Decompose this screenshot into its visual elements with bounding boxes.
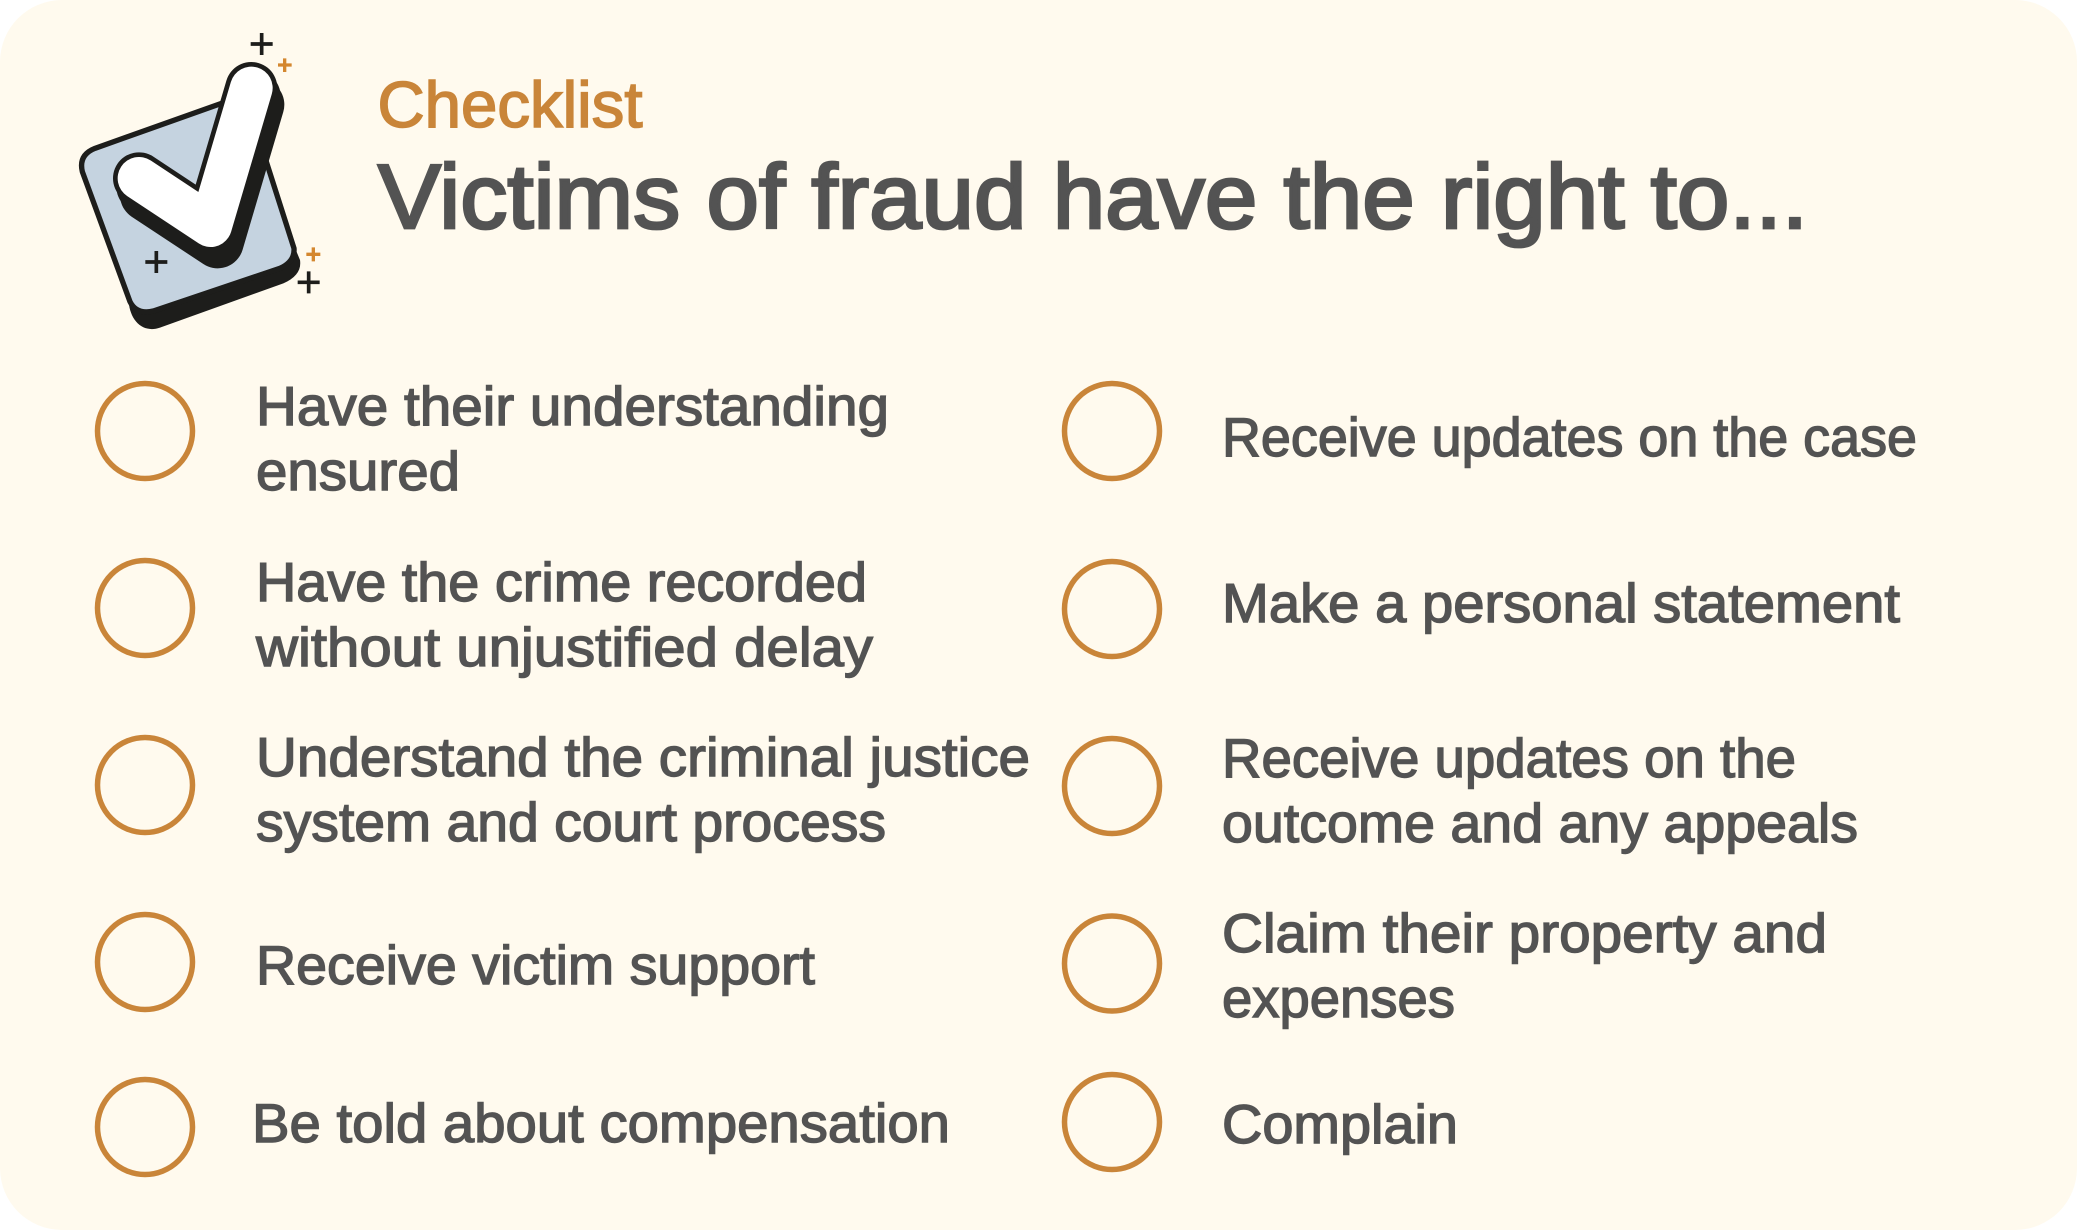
checklist item: case updates [1064, 384, 1917, 478]
checklist item: crime recorded [98, 551, 874, 678]
checklist item: outcome updates: Receive updates on the [1222, 727, 1796, 789]
checklist item: understanding [98, 375, 889, 502]
checklist item: victim support [98, 914, 815, 1010]
icon: checkbox with tick [82, 33, 320, 329]
checklist item: outcome updates [1064, 727, 1858, 854]
checklist item: case updates: Receive updates on the case [1222, 406, 1917, 468]
checklist item: outcome updates: outcome and any appeals [1222, 792, 1858, 854]
checklist item: property and expenses [1064, 902, 1827, 1029]
checklist item: understanding: Have their understanding [256, 375, 889, 437]
checklist item: justice system: Understand the criminal justice [256, 726, 1030, 788]
checklist item: crime recorded: without unjustified delay [255, 616, 874, 678]
checklist item: understanding: ensured [256, 440, 460, 502]
checklist item: justice system: system and court process [256, 791, 886, 853]
checklist item: compensation: Be told about compensation [252, 1092, 950, 1154]
checklist item: crime recorded: Have the crime recorded [256, 551, 867, 613]
checklist item: justice system [98, 726, 1030, 853]
checklist item: personal statement: Make a personal statement [1222, 572, 1900, 634]
checklist item: complain [1064, 1074, 1458, 1170]
eyebrow: Checklist: Checklist [378, 68, 642, 141]
checklist item: victim support: Receive victim support [256, 934, 815, 996]
title: Victims of fraud have the right to... [378, 147, 1808, 248]
checklist item: property and expenses: expenses [1222, 967, 1455, 1029]
checklist item: personal statement [1064, 562, 1900, 656]
checklist item: property and expenses: Claim their property and [1222, 902, 1827, 964]
checklist item: compensation [98, 1080, 950, 1174]
checklist item: complain: Complain [1222, 1093, 1458, 1155]
